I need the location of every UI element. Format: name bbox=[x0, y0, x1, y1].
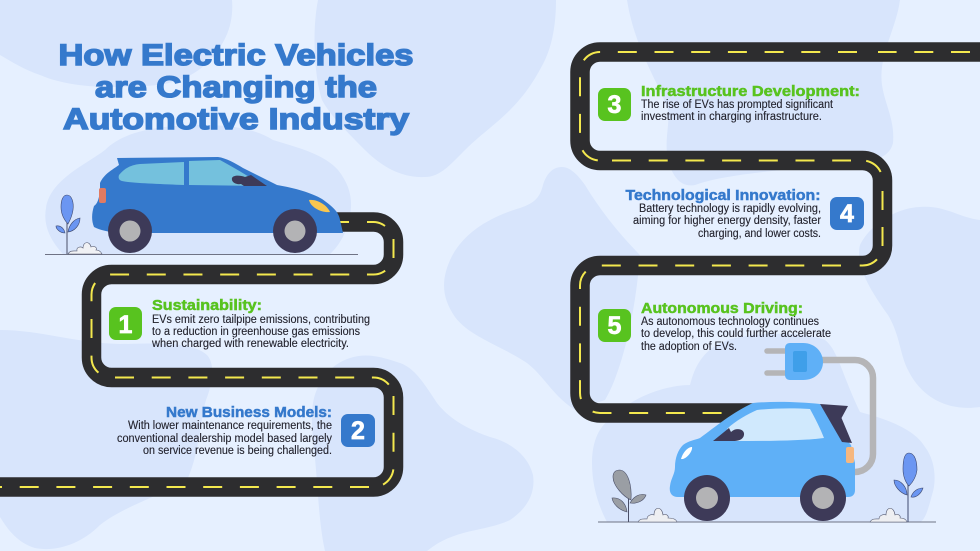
text 3: investment in charging infrastructure. bbox=[641, 111, 822, 123]
text 3: The rise of EVs has prompted significant bbox=[641, 99, 834, 111]
section 5: autonomous driving bbox=[598, 300, 831, 353]
text 2 bbox=[117, 420, 332, 457]
icon: blue plant right bbox=[894, 453, 923, 522]
text 5: As autonomous technology continues bbox=[641, 316, 819, 328]
driver bbox=[232, 175, 267, 186]
electric car bbox=[670, 402, 855, 521]
road: right winding bbox=[580, 52, 980, 413]
text 1: when charged with renewable electricity. bbox=[151, 338, 349, 350]
text 3 bbox=[641, 99, 834, 123]
section 3: infrastructure bbox=[598, 83, 860, 123]
wheels bbox=[108, 209, 317, 253]
text 4: charging, and lower costs. bbox=[698, 228, 821, 240]
badge 5 bbox=[598, 309, 631, 342]
text 4 bbox=[633, 203, 821, 240]
icon: blue plant bbox=[56, 195, 80, 254]
title: How Electric Vehicles bbox=[58, 39, 414, 72]
icon: bush right bbox=[870, 508, 907, 522]
left ground line bbox=[45, 254, 358, 256]
headlight glint bbox=[681, 447, 692, 459]
badge 2 bbox=[341, 414, 375, 447]
title bbox=[58, 39, 414, 136]
rear light bbox=[846, 447, 854, 463]
tail light bbox=[99, 188, 106, 203]
text 2: conventional dealership model based largely bbox=[117, 433, 332, 445]
icon: grey plant bbox=[612, 470, 646, 522]
heading 5: Autonomous Driving: bbox=[641, 300, 803, 317]
heading 4: Technological Innovation: bbox=[626, 187, 820, 204]
title: are Changing the bbox=[95, 71, 377, 104]
text 1: EVs emit zero tailpipe emissions, contributing bbox=[152, 314, 370, 326]
badge 4: 4 bbox=[840, 200, 854, 228]
text 4: Battery technology is rapidly evolving, bbox=[639, 203, 821, 215]
badge 4 bbox=[830, 197, 864, 230]
heading 2: New Business Models: bbox=[166, 404, 332, 421]
icon: bush bbox=[68, 243, 102, 254]
section 2: new business models bbox=[117, 404, 375, 457]
text 5 bbox=[641, 316, 831, 353]
car windows bbox=[119, 162, 184, 185]
blue car bbox=[92, 157, 343, 253]
text 1: to a reduction in greenhouse gas emissions bbox=[152, 326, 360, 338]
spoiler bbox=[820, 404, 852, 443]
driver bbox=[713, 428, 744, 441]
text 5: to develop, this could further accelerate bbox=[641, 328, 831, 340]
badge 2: 2 bbox=[351, 417, 365, 445]
icon: bush left bbox=[638, 508, 677, 522]
heading 1: Sustainability: bbox=[152, 297, 262, 314]
badge 1: 1 bbox=[119, 311, 133, 339]
text 4: aiming for higher energy density, faster bbox=[633, 215, 821, 227]
text 2: With lower maintenance requirements, the bbox=[128, 420, 332, 432]
badge 1 bbox=[109, 307, 142, 340]
section 1: sustainability bbox=[109, 297, 370, 350]
headlight bbox=[309, 200, 330, 212]
road: left winding bbox=[0, 222, 394, 487]
badge 5: 5 bbox=[608, 312, 622, 340]
text 2: on service revenue is being challenged. bbox=[143, 445, 332, 457]
badge 3: 3 bbox=[608, 91, 621, 119]
title: Automotive Industry bbox=[63, 103, 409, 136]
heading 3: Infrastructure Development: bbox=[641, 83, 860, 100]
text 1 bbox=[151, 314, 370, 350]
wheels bbox=[684, 475, 846, 521]
section 4: technological innovation bbox=[626, 187, 864, 240]
window bbox=[727, 408, 824, 441]
right ground line bbox=[598, 521, 936, 523]
icon: plug and cable bbox=[767, 343, 873, 472]
text 5: the adoption of EVs. bbox=[641, 341, 737, 353]
badge 3 bbox=[598, 88, 631, 121]
